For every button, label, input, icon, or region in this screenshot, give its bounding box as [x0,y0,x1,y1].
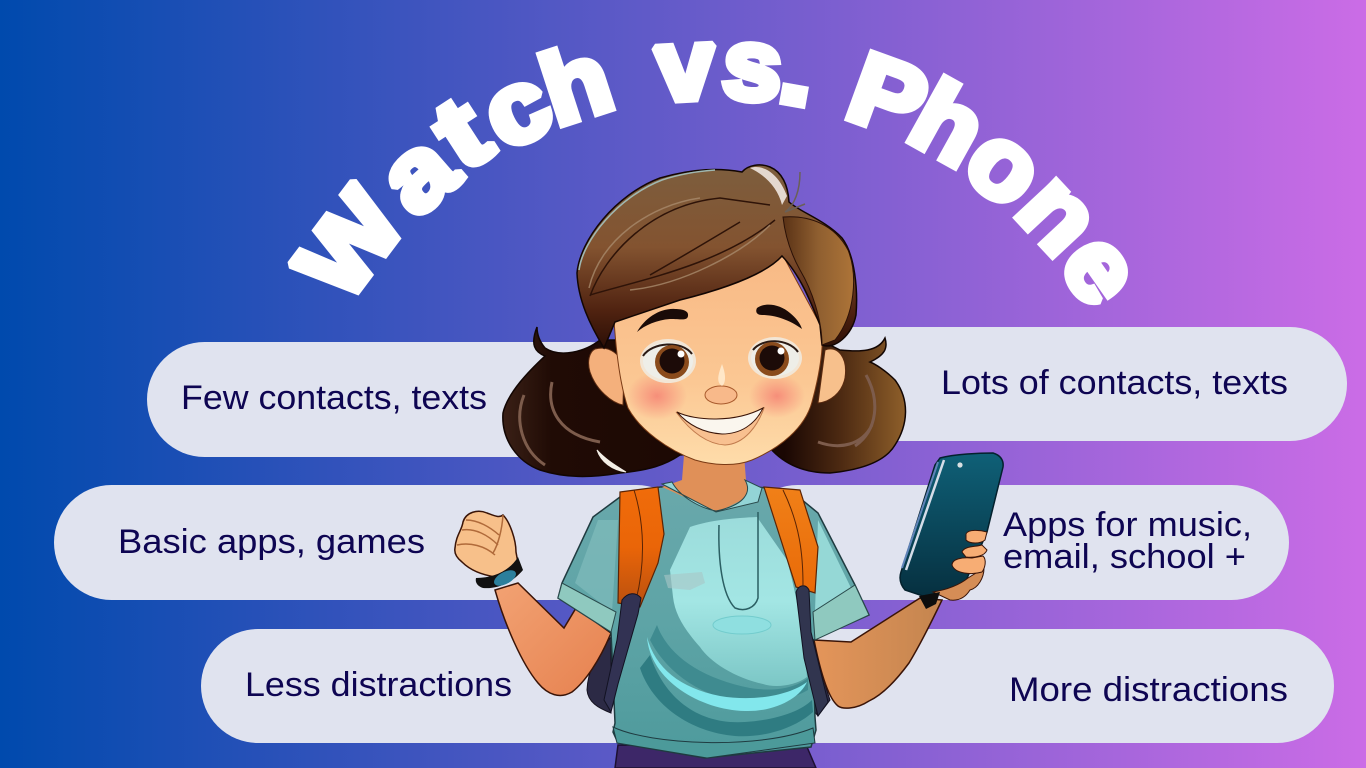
pocket blob [713,616,771,634]
nose highlight [718,364,725,386]
shirt [558,485,869,758]
right brow [756,305,802,329]
pill: basic apps: Basic apps, games [118,523,425,561]
title: Watch vs. Phone on an arc: o [946,101,1066,228]
left fist with watch [455,511,523,589]
cowlick [750,167,787,205]
right orange strap [764,487,818,593]
teeth [677,408,763,434]
nose [705,386,737,404]
neck [662,455,762,512]
right eye [748,337,802,379]
collar [662,480,762,512]
title: Watch vs. Phone on an arc: n [997,151,1123,275]
title: Watch vs. Phone on an arc: e [1040,212,1165,324]
pill: more distractions [760,629,1334,743]
shirt crescent highlight [647,637,807,711]
phone [900,453,1003,596]
hair white streak [597,450,626,472]
title: Watch vs. Phone on an arc: a [357,110,478,236]
pill: apps for music: Apps for music, [1003,506,1252,544]
back hair [503,327,906,476]
pill: less distractions [201,629,701,743]
left brow [637,309,688,332]
title: Watch vs. Phone on an arc: v [653,7,717,122]
shirt right side light [815,520,852,612]
title: Watch vs. Phone on an arc: h [893,59,1004,188]
title: Watch vs. Phone on an arc [274,6,1165,324]
pill: few contacts [147,342,647,457]
shirt hem band [613,727,815,758]
pill: lots of contacts: Lots of contacts, texts [941,364,1288,402]
right dark strap [796,586,828,716]
left ear [589,348,624,405]
illustration: girl with watch and phone [455,165,1003,768]
pill: few contacts: Few contacts, texts [181,379,487,417]
right ear [818,349,846,403]
pill: basic apps [54,485,694,600]
pants [615,745,816,768]
backpack body [587,637,830,716]
pill: less distractions: Less distractions [245,666,512,704]
shirt upper-left sleeve shade [575,520,618,612]
title: Watch vs. Phone on an arc: W [274,169,426,319]
left orange strap [618,487,664,607]
shirt dark band [640,655,813,736]
left dark strap [604,594,641,712]
chest mark [664,572,705,590]
cheeks [627,372,687,420]
phone camera dots [957,462,963,468]
shirt mid band [650,625,808,703]
face [614,250,822,465]
title: Watch vs. Phone on an arc: . [773,12,825,127]
title: Watch vs. Phone on an arc: s [720,6,786,122]
pill: lots of contacts [780,327,1347,441]
hair outer rim highlight [579,170,715,270]
right cheek [749,374,805,418]
pill: apps for music: email, school + [1003,538,1246,576]
shirt light panel [670,517,807,686]
left arm [495,583,611,695]
pill: more distractions: More distractions [1009,671,1288,709]
mouth [676,408,764,445]
phone silver edge [906,460,944,570]
title: Watch vs. Phone on an arc: h [528,20,624,147]
title: Watch vs. Phone on an arc: P [835,32,941,161]
right arm [814,598,942,708]
phone hand [933,530,987,600]
hair highlight [589,198,770,290]
left strap seams [634,490,643,600]
back hair highlights [520,375,875,465]
title: Watch vs. Phone on an arc: c [465,45,568,171]
left eye [640,339,696,383]
right wrist band [919,592,940,609]
placket necklace loop [719,512,758,610]
title: Watch vs. Phone on an arc: t [414,76,508,191]
pill: apps for music [740,485,1289,600]
right strap seam [783,490,803,585]
right hair lock [783,217,854,345]
hair strand lines [590,198,775,296]
shirt sleeve cuffs [558,583,869,640]
stray hair [785,172,805,212]
phone blue edge [902,462,938,568]
hair top [577,165,857,348]
